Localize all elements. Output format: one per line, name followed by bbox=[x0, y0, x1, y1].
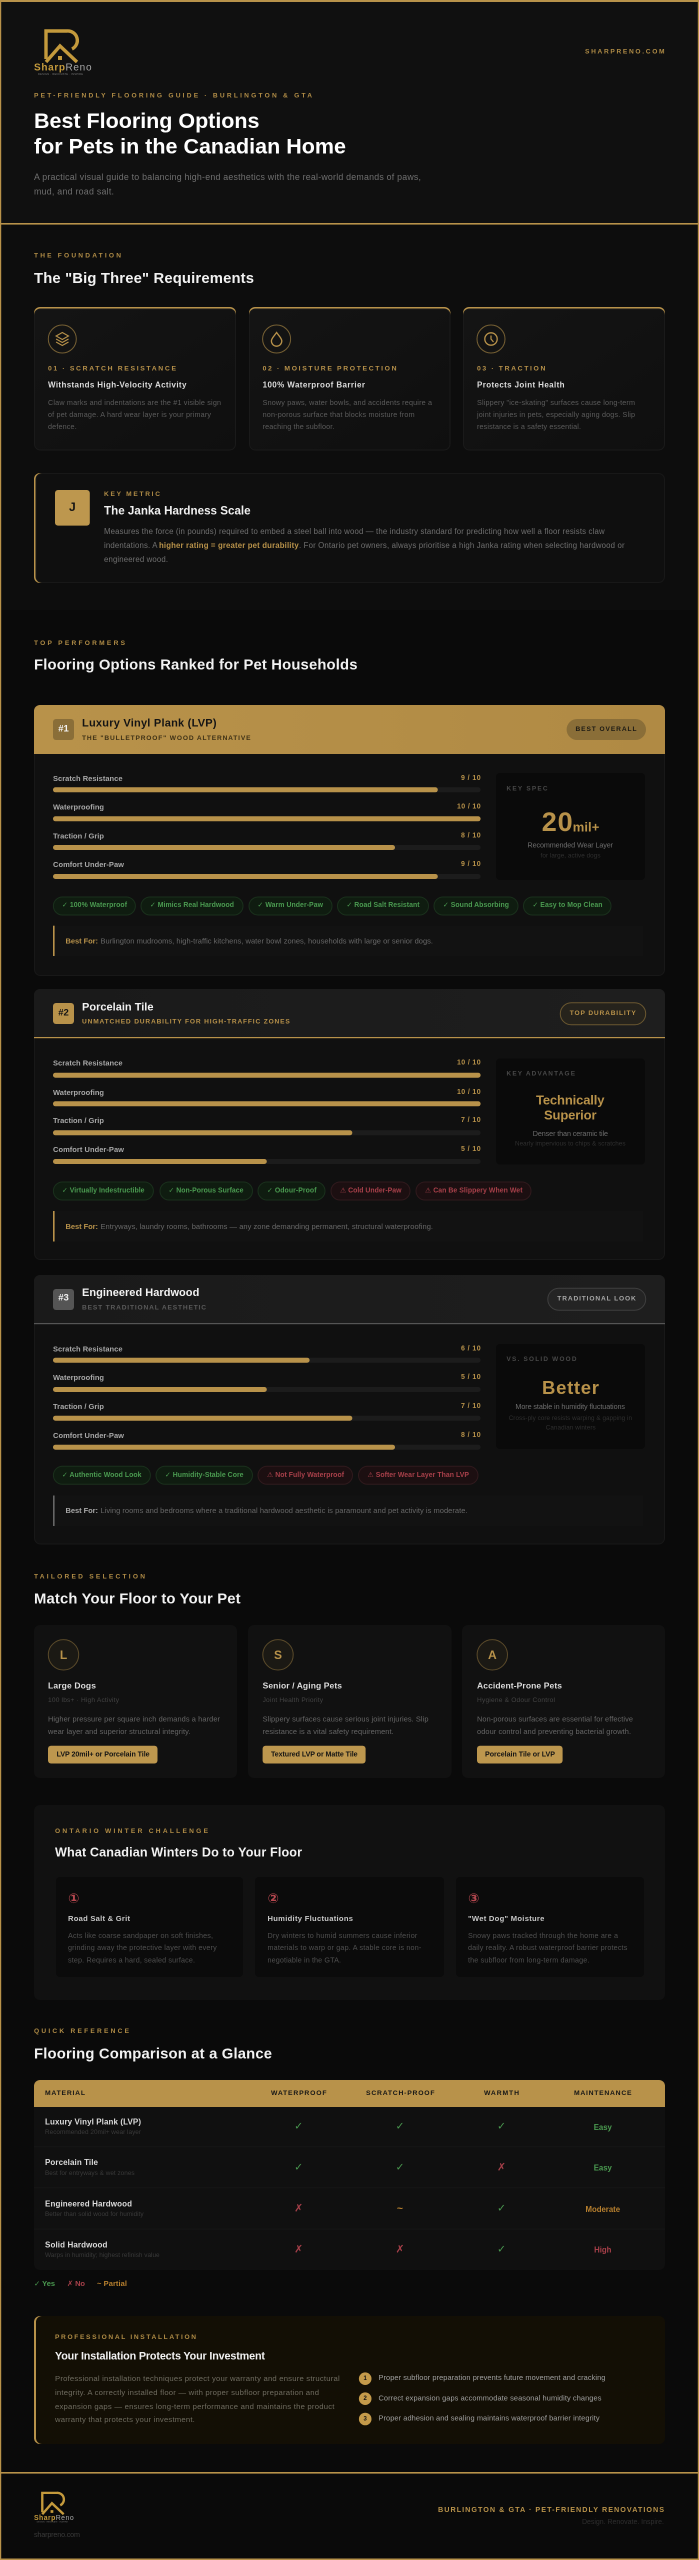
recommendation: Porcelain Tile or LVP bbox=[485, 1751, 555, 1759]
main title: Best Flooring Options bbox=[34, 109, 260, 133]
installation paragraph: Professional installation techniques protect your warranty and ensure structural bbox=[55, 2374, 340, 2383]
row: solid hardwood: Warps in humidity; highest refinish value bbox=[45, 2252, 160, 2259]
header: engineered: #3 bbox=[58, 1292, 69, 1304]
bar: traction 7/10: 7 / 10 bbox=[461, 1117, 481, 1124]
best for note: Entryways, laundry rooms, bathrooms — any zone demanding permanent, structural waterproofing. bbox=[100, 1222, 433, 1231]
bar: traction 7/10 bbox=[53, 1116, 481, 1135]
panel: janka hardness callout bbox=[34, 473, 664, 583]
row: porcelain tile: ✓ bbox=[396, 2162, 404, 2174]
winter card: humidity bbox=[255, 1877, 444, 1977]
chips: ✓ Mimics Real Hardwood bbox=[150, 902, 234, 909]
panel: accident-prone pets: Hygiene & Odour Control bbox=[477, 1697, 556, 1704]
winter card: humidity: Dry winters to humid summers cause inferior bbox=[268, 1931, 418, 1940]
icon: L bbox=[48, 1640, 79, 1670]
header: engineered bbox=[34, 1275, 665, 1324]
bar: traction 7/10: 7 / 10 bbox=[461, 1403, 481, 1410]
intro text: mud, and road salt. bbox=[34, 186, 114, 196]
main title bbox=[34, 109, 346, 159]
icon: layers bbox=[48, 325, 76, 353]
bar: comfort 5/10: Comfort Under-Paw bbox=[53, 1145, 124, 1154]
panel: janka hardness callout: Measures the force (in pounds) required to embed a steel ball into wood — the industry standard for predicting how well a floor resists claw bbox=[104, 527, 605, 536]
icon: clock bbox=[477, 325, 505, 353]
winter card: wet dog: daily reality. A robust waterproof barrier protects bbox=[468, 1943, 628, 1952]
table header bbox=[34, 2080, 665, 2107]
panel: janka hardness callout: indentations. A bbox=[104, 541, 158, 550]
row: engineered hardwood bbox=[45, 2200, 621, 2218]
panel: professional installation: PROFESSIONAL INSTALLATION bbox=[55, 2334, 196, 2341]
bar: scratch resistance 9/10: Scratch Resistance bbox=[53, 774, 122, 783]
winter card: humidity: negotiable in the GTA. bbox=[268, 1956, 341, 1964]
table legend: ~ Partial bbox=[97, 2279, 127, 2288]
panel: scratch resistance: Withstands High-Velocity Activity bbox=[48, 380, 187, 390]
winter card: road salt: grinding away the protective layer with every bbox=[68, 1943, 217, 1952]
key spec panel: KEY SPEC bbox=[506, 786, 548, 792]
bar: scratch resistance 10/10: Scratch Resistance bbox=[53, 1058, 122, 1068]
chips bbox=[53, 1466, 478, 1484]
panel: scratch resistance bbox=[34, 307, 236, 450]
icon: J badge bbox=[55, 490, 90, 526]
row: solid hardwood bbox=[45, 2240, 612, 2259]
chips: ✓ Humidity-Stable Core bbox=[165, 1472, 244, 1479]
chips: ⚠ Can Be Slippery When Wet bbox=[425, 1186, 523, 1194]
chips: ⚠ Softer Wear Layer Than LVP bbox=[368, 1471, 469, 1479]
bar: comfort 8/10 bbox=[53, 1431, 481, 1450]
chips: ✓ Non-Porous Surface bbox=[168, 1188, 244, 1194]
best for note bbox=[53, 926, 643, 956]
recommendation: LVP 20mil+ or Porcelain Tile bbox=[57, 1751, 150, 1759]
section heading: foundation bbox=[34, 252, 254, 287]
row: LVP bbox=[45, 2118, 613, 2136]
bar: scratch resistance 6/10: Scratch Resistance bbox=[53, 1344, 122, 1354]
best for note: Living rooms and bedrooms where a traditional hardwood aesthetic is paramount and pet activity is moderate. bbox=[100, 1506, 468, 1515]
vs solid wood panel: More stable in humidity fluctuations bbox=[515, 1402, 625, 1411]
bar: scratch resistance 10/10: 10 / 10 bbox=[457, 1060, 481, 1066]
key advantage panel bbox=[496, 1058, 645, 1164]
bar: waterproofing 10/10: Waterproofing bbox=[53, 1088, 104, 1097]
icon: number three: ③ bbox=[468, 1891, 479, 1906]
panel: ontario winter challenge: ONTARIO WINTER CHALLENGE bbox=[55, 1828, 209, 1835]
best for note: Best For: bbox=[66, 1506, 98, 1515]
panel: large dogs: Large Dogs bbox=[48, 1680, 96, 1690]
panel: luxury vinyl plank bbox=[34, 705, 665, 976]
best for note: Best For: bbox=[66, 936, 98, 946]
section heading: tailored selection bbox=[34, 1574, 241, 1608]
panel: scratch resistance: defence. bbox=[48, 422, 77, 431]
footer logo: DESIGN · RENOVATE · INSPIRE bbox=[37, 2521, 69, 2524]
key advantage panel: KEY ADVANTAGE bbox=[506, 1070, 576, 1078]
chips bbox=[53, 1182, 531, 1200]
header: LVP: Luxury Vinyl Plank (LVP) bbox=[82, 718, 217, 730]
chips: ✓ Easy to Mop Clean bbox=[532, 902, 602, 909]
header: porcelain: Porcelain Tile bbox=[82, 1002, 154, 1014]
row: solid hardwood: Solid Hardwood bbox=[45, 2240, 108, 2250]
panel: janka hardness callout: higher rating = greater pet durability bbox=[159, 541, 299, 550]
best for note: Best For: bbox=[66, 1222, 98, 1231]
comparison table bbox=[34, 2080, 665, 2270]
section heading: top performers: TOP PERFORMERS bbox=[34, 640, 126, 647]
bar: comfort 5/10 bbox=[53, 1145, 481, 1164]
chips: ✓ Virtually Indestructible bbox=[62, 1188, 145, 1194]
table legend bbox=[34, 2279, 127, 2288]
chips: ✓ Authentic Wood Look bbox=[62, 1472, 142, 1479]
section heading: quick reference bbox=[34, 2028, 272, 2063]
panel: janka hardness callout: KEY METRIC bbox=[104, 491, 160, 498]
table header: MATERIAL bbox=[45, 2090, 85, 2097]
footer logo: Sharp bbox=[34, 2515, 55, 2522]
panel: janka hardness callout: The Janka Hardness Scale bbox=[104, 504, 251, 518]
panel: moisture protection: non-porous surface that blocks moisture from bbox=[263, 410, 415, 419]
vs solid wood panel: Cross-ply core resists warping & gapping in bbox=[509, 1415, 632, 1422]
chips: ⚠ Not Fully Waterproof bbox=[267, 1471, 345, 1479]
panel: ontario winter challenge bbox=[34, 1805, 665, 2000]
recommendation: Textured LVP or Matte Tile bbox=[271, 1751, 358, 1759]
panel: senior pets bbox=[248, 1625, 452, 1778]
panel: traction bbox=[463, 307, 665, 450]
row: engineered hardwood: Better than solid wood for humidity bbox=[45, 2211, 144, 2218]
row: porcelain tile bbox=[45, 2158, 613, 2177]
checklist: 3 bbox=[364, 2416, 368, 2422]
header: LVP: #1 bbox=[58, 724, 69, 734]
key spec panel bbox=[496, 773, 645, 880]
logo: Reno bbox=[66, 62, 92, 74]
vs solid wood panel: VS. SOLID WOOD bbox=[506, 1356, 577, 1363]
checklist: Correct expansion gaps accommodate seasonal humidity changes bbox=[378, 2394, 602, 2402]
panel: traction: Slippery "ice-skating" surfaces cause long-term bbox=[477, 398, 635, 407]
key spec panel: Recommended Wear Layer bbox=[528, 840, 614, 850]
bar: traction 8/10: Traction / Grip bbox=[53, 832, 104, 840]
chips: ✓ Road Salt Resistant bbox=[346, 902, 420, 909]
row: porcelain tile: ✓ bbox=[294, 2162, 303, 2174]
key advantage panel: Superior bbox=[544, 1108, 596, 1122]
header: porcelain: #2 bbox=[58, 1008, 69, 1018]
winter card: road salt: Road Salt & Grit bbox=[68, 1914, 130, 1923]
winter card: wet dog bbox=[456, 1877, 644, 1977]
bar: comfort 9/10: Comfort Under-Paw bbox=[53, 860, 124, 869]
header: engineered: Engineered Hardwood bbox=[82, 1287, 199, 1299]
winter card: wet dog: the subfloor from long-term damage. bbox=[468, 1956, 589, 1964]
section heading: quick reference: QUICK REFERENCE bbox=[34, 2028, 130, 2035]
icon: number one: ① bbox=[68, 1891, 79, 1906]
panel: scratch resistance: 01 · SCRATCH RESISTANCE bbox=[48, 366, 176, 372]
key advantage panel: Denser than ceramic tile bbox=[533, 1129, 608, 1138]
panel: large dogs: wear layer and superior structural integrity. bbox=[47, 1727, 190, 1736]
bar: comfort 8/10: 8 / 10 bbox=[461, 1432, 481, 1439]
panel: moisture protection bbox=[249, 307, 450, 450]
logo: Sharp bbox=[34, 62, 65, 74]
section heading: top performers bbox=[34, 640, 358, 674]
checklist: Proper subfloor preparation prevents future movement and cracking bbox=[378, 2373, 605, 2382]
icon: number two: ② bbox=[268, 1891, 279, 1906]
panel: senior pets: resistance is a vital safety requirement. bbox=[263, 1727, 394, 1736]
row: LVP: ✓ bbox=[396, 2120, 404, 2132]
header: porcelain: TOP DURABILITY bbox=[570, 1010, 636, 1017]
recommendation bbox=[477, 1746, 563, 1764]
panel: scratch resistance: Claw marks and indentations are the #1 visible sign bbox=[48, 398, 221, 407]
checklist: Proper adhesion and sealing maintains waterproof barrier integrity bbox=[378, 2414, 600, 2422]
table header: WATERPROOF bbox=[271, 2090, 326, 2097]
recommendation bbox=[48, 1746, 158, 1764]
panel: accident-prone pets: odour control and preventing bacterial growth. bbox=[477, 1727, 631, 1736]
section heading: tailored selection: Match Your Floor to Your Pet bbox=[34, 1592, 241, 1608]
bar: traction 7/10: Traction / Grip bbox=[53, 1116, 104, 1125]
row: LVP: ✓ bbox=[497, 2120, 506, 2132]
panel: accident-prone pets: Non-porous surfaces are essential for effective bbox=[477, 1714, 633, 1724]
bar: comfort 9/10: 9 / 10 bbox=[461, 861, 481, 868]
bar: traction 8/10: 8 / 10 bbox=[461, 832, 481, 840]
row: solid hardwood: ✗ bbox=[396, 2244, 404, 2256]
recommendation bbox=[263, 1746, 366, 1764]
winter card: wet dog: Snowy paws tracked through the home are a bbox=[468, 1931, 618, 1940]
installation paragraph: expansion gaps — ensures long-term performance and maintains the product bbox=[55, 2402, 335, 2411]
header: LVP: BEST OVERALL bbox=[576, 726, 636, 733]
header: LVP bbox=[34, 705, 665, 754]
icon: A: A bbox=[488, 1648, 497, 1662]
winter card: humidity: Humidity Fluctuations bbox=[268, 1914, 353, 1923]
panel: janka hardness callout: . For Ontario pet owners, always prioritise a high Janka rating when selecting hardwood or bbox=[299, 541, 625, 550]
key advantage panel: Technically bbox=[536, 1092, 605, 1108]
chips: ✓ Warm Under-Paw bbox=[258, 902, 324, 909]
chips bbox=[53, 897, 611, 915]
bar: scratch resistance 9/10: 9 / 10 bbox=[461, 775, 481, 782]
logo: DESIGN · RENOVATE · INSPIRE bbox=[38, 72, 83, 76]
bar: scratch resistance 6/10: 6 / 10 bbox=[461, 1346, 481, 1352]
key spec panel: for large, active dogs bbox=[540, 852, 600, 860]
table legend: ✓ Yes bbox=[34, 2279, 55, 2288]
footer logo bbox=[34, 2493, 74, 2524]
bar: waterproofing 10/10: Waterproofing bbox=[53, 802, 104, 812]
bar: traction 7/10: Traction / Grip bbox=[53, 1402, 104, 1411]
panel: janka hardness callout: engineered wood. bbox=[104, 555, 168, 564]
row: engineered hardwood: ~ bbox=[397, 2203, 403, 2215]
bar: comfort 9/10 bbox=[53, 860, 481, 879]
chips: ✓ Sound Absorbing bbox=[443, 902, 509, 909]
table header: MAINTENANCE bbox=[574, 2090, 632, 2097]
panel: traction: resistance is a safety essential. bbox=[477, 422, 581, 431]
header band bbox=[34, 31, 665, 196]
table legend: ✗ No bbox=[67, 2279, 85, 2288]
section heading: foundation: THE FOUNDATION bbox=[34, 252, 121, 260]
header: porcelain: UNMATCHED DURABILITY FOR HIGH-TRAFFIC ZONES bbox=[82, 1018, 290, 1026]
row: LVP: Easy bbox=[594, 2123, 613, 2132]
panel: moisture protection: 02 · MOISTURE PROTECTION bbox=[263, 366, 397, 372]
bar: comfort 8/10: Comfort Under-Paw bbox=[53, 1431, 124, 1440]
panel: accident-prone pets: Accident-Prone Pets bbox=[477, 1680, 562, 1690]
logo bbox=[34, 31, 92, 76]
footer logo: Reno bbox=[56, 2515, 74, 2522]
panel: senior pets: Senior / Aging Pets bbox=[263, 1680, 342, 1690]
panel: moisture protection: reaching the subfloor. bbox=[263, 422, 334, 431]
chips: ✓ 100% Waterproof bbox=[62, 902, 128, 909]
vs solid wood panel bbox=[496, 1344, 645, 1449]
row: porcelain tile: Easy bbox=[594, 2164, 613, 2172]
panel: engineered hardwood bbox=[34, 1275, 665, 1544]
row: engineered hardwood: Engineered Hardwood bbox=[45, 2200, 132, 2208]
intro text bbox=[34, 172, 421, 196]
panel: professional installation bbox=[34, 2316, 665, 2444]
intro text: A practical visual guide to balancing high-end aesthetics with the real-world demands of paws, bbox=[34, 172, 421, 182]
panel: porcelain tile bbox=[34, 989, 665, 1260]
section heading: foundation: The "Big Three" Requirements bbox=[34, 271, 254, 287]
row: LVP: Recommended 20mil+ wear layer bbox=[45, 2129, 142, 2136]
key spec panel: mil+ bbox=[573, 820, 600, 834]
bar: waterproofing 5/10: Waterproofing bbox=[53, 1373, 104, 1382]
table header: WARMTH bbox=[484, 2090, 519, 2097]
vs solid wood panel: Canadian winters bbox=[546, 1424, 596, 1432]
row: engineered hardwood: ✗ bbox=[294, 2203, 303, 2215]
best for note bbox=[53, 1211, 643, 1242]
bar: waterproofing 10/10 bbox=[53, 802, 481, 821]
bar: waterproofing 10/10 bbox=[53, 1088, 481, 1106]
winter card: humidity: materials to warp or gap. A stable core is non- bbox=[268, 1943, 422, 1952]
footer: sharpreno.com bbox=[34, 2530, 80, 2539]
bar: waterproofing 5/10: 5 / 10 bbox=[461, 1374, 481, 1381]
row: porcelain tile: Best for entryways & wet zones bbox=[45, 2170, 135, 2177]
bar: waterproofing 10/10: 10 / 10 bbox=[457, 804, 481, 810]
key spec panel: 20 bbox=[542, 807, 573, 837]
panel: large dogs: 100 lbs+ · High Activity bbox=[48, 1697, 120, 1704]
checklist: 1 bbox=[364, 2376, 368, 2382]
vs solid wood panel: Better bbox=[542, 1377, 599, 1398]
panel: traction: joint injuries in pets, especially aging dogs. Slip bbox=[476, 410, 635, 419]
header: engineered: BEST TRADITIONAL AESTHETIC bbox=[82, 1304, 206, 1312]
panel: large dogs bbox=[34, 1625, 237, 1778]
winter card: wet dog: "Wet Dog" Moisture bbox=[468, 1914, 544, 1923]
panel: ontario winter challenge: What Canadian Winters Do to Your Floor bbox=[55, 1845, 302, 1859]
panel: large dogs: Higher pressure per square inch demands a harder bbox=[48, 1714, 221, 1724]
bar: waterproofing 10/10: 10 / 10 bbox=[457, 1089, 481, 1096]
winter card: road salt: Acts like coarse sandpaper on soft finishes, bbox=[68, 1931, 213, 1940]
icon: S bbox=[263, 1640, 293, 1670]
winter card: road salt: step. Requires a hard, sealed surface. bbox=[68, 1956, 195, 1964]
checklist bbox=[359, 2372, 605, 2425]
row: solid hardwood: ✗ bbox=[294, 2244, 303, 2256]
installation paragraph: warranty that protects your investment. bbox=[54, 2415, 195, 2424]
chips: ⚠ Cold Under-Paw bbox=[340, 1186, 402, 1194]
section heading: top performers: Flooring Options Ranked for Pet Households bbox=[34, 658, 358, 674]
table header: SCRATCH-PROOF bbox=[366, 2090, 434, 2097]
row: LVP: Luxury Vinyl Plank (LVP) bbox=[45, 2118, 141, 2126]
panel: traction: 03 · TRACTION bbox=[477, 366, 545, 372]
footer bbox=[0, 2472, 699, 2539]
header: engineered: TRADITIONAL LOOK bbox=[557, 1296, 636, 1302]
winter card: road salt bbox=[56, 1877, 243, 1977]
icon: S: S bbox=[274, 1648, 282, 1662]
bar: waterproofing 5/10 bbox=[53, 1373, 481, 1392]
icon: A bbox=[477, 1640, 507, 1670]
best for note bbox=[53, 1496, 643, 1526]
panel: moisture protection: 100% Waterproof Barrier bbox=[263, 380, 365, 390]
installation paragraph bbox=[54, 2374, 340, 2424]
main title: for Pets in the Canadian Home bbox=[34, 135, 346, 159]
panel: professional installation: Your Installation Protects Your Investment bbox=[55, 2351, 265, 2363]
panel: senior pets: Slippery surfaces cause serious joint injuries. Slip bbox=[263, 1714, 428, 1724]
panel: senior pets: Joint Health Priority bbox=[263, 1697, 324, 1704]
section heading: quick reference: Flooring Comparison at a Glance bbox=[34, 2047, 272, 2063]
header: LVP: THE "BULLETPROOF" WOOD ALTERNATIVE bbox=[82, 735, 251, 742]
chips: ✓ Odour-Proof bbox=[267, 1188, 317, 1194]
key advantage panel: Nearly impervious to chips & scratches bbox=[515, 1140, 626, 1148]
bar: scratch resistance 6/10 bbox=[53, 1344, 481, 1363]
row: solid hardwood: High bbox=[594, 2246, 612, 2254]
bar: traction 8/10 bbox=[53, 832, 481, 850]
panel: traction: Protects Joint Health bbox=[477, 380, 565, 390]
icon: L: L bbox=[60, 1648, 67, 1662]
best for note: Burlington mudrooms, high-traffic kitchens, water bowl zones, households with large or senior dogs. bbox=[100, 936, 433, 946]
row: LVP: ✓ bbox=[294, 2120, 303, 2132]
row: engineered hardwood: Moderate bbox=[585, 2205, 621, 2214]
checklist: 2 bbox=[364, 2396, 368, 2402]
website link: SHARPRENO.COM bbox=[585, 48, 665, 56]
row: porcelain tile: Porcelain Tile bbox=[45, 2158, 99, 2167]
bar: traction 7/10 bbox=[53, 1402, 481, 1421]
icon: J badge: J bbox=[69, 500, 76, 514]
icon: water drop bbox=[263, 325, 291, 353]
bar: comfort 5/10: 5 / 10 bbox=[461, 1146, 481, 1153]
header: porcelain bbox=[34, 989, 665, 1038]
panel: scratch resistance: of pet damage. A hard wear layer is your primary bbox=[48, 410, 211, 419]
panel: moisture protection: Snowy paws, water bowls, and accidents require a bbox=[263, 398, 432, 407]
row: engineered hardwood: ✓ bbox=[497, 2203, 506, 2215]
installation paragraph: integrity. A correctly installed floor — with proper subfloor preparation and bbox=[55, 2388, 319, 2397]
panel: accident-prone pets bbox=[462, 1625, 665, 1778]
footer: Design. Renovate. Inspire. bbox=[582, 2519, 664, 2526]
bar: scratch resistance 10/10 bbox=[53, 1058, 481, 1078]
section heading: tailored selection: TAILORED SELECTION bbox=[34, 1574, 145, 1580]
eyebrow: PET-FRIENDLY FLOORING GUIDE · BURLINGTON & GTA bbox=[34, 92, 312, 100]
row: solid hardwood: ✓ bbox=[497, 2244, 506, 2256]
footer: BURLINGTON & GTA · PET-FRIENDLY RENOVATIONS bbox=[438, 2505, 664, 2514]
bar: scratch resistance 9/10 bbox=[53, 774, 481, 792]
row: porcelain tile: ✗ bbox=[497, 2162, 506, 2174]
